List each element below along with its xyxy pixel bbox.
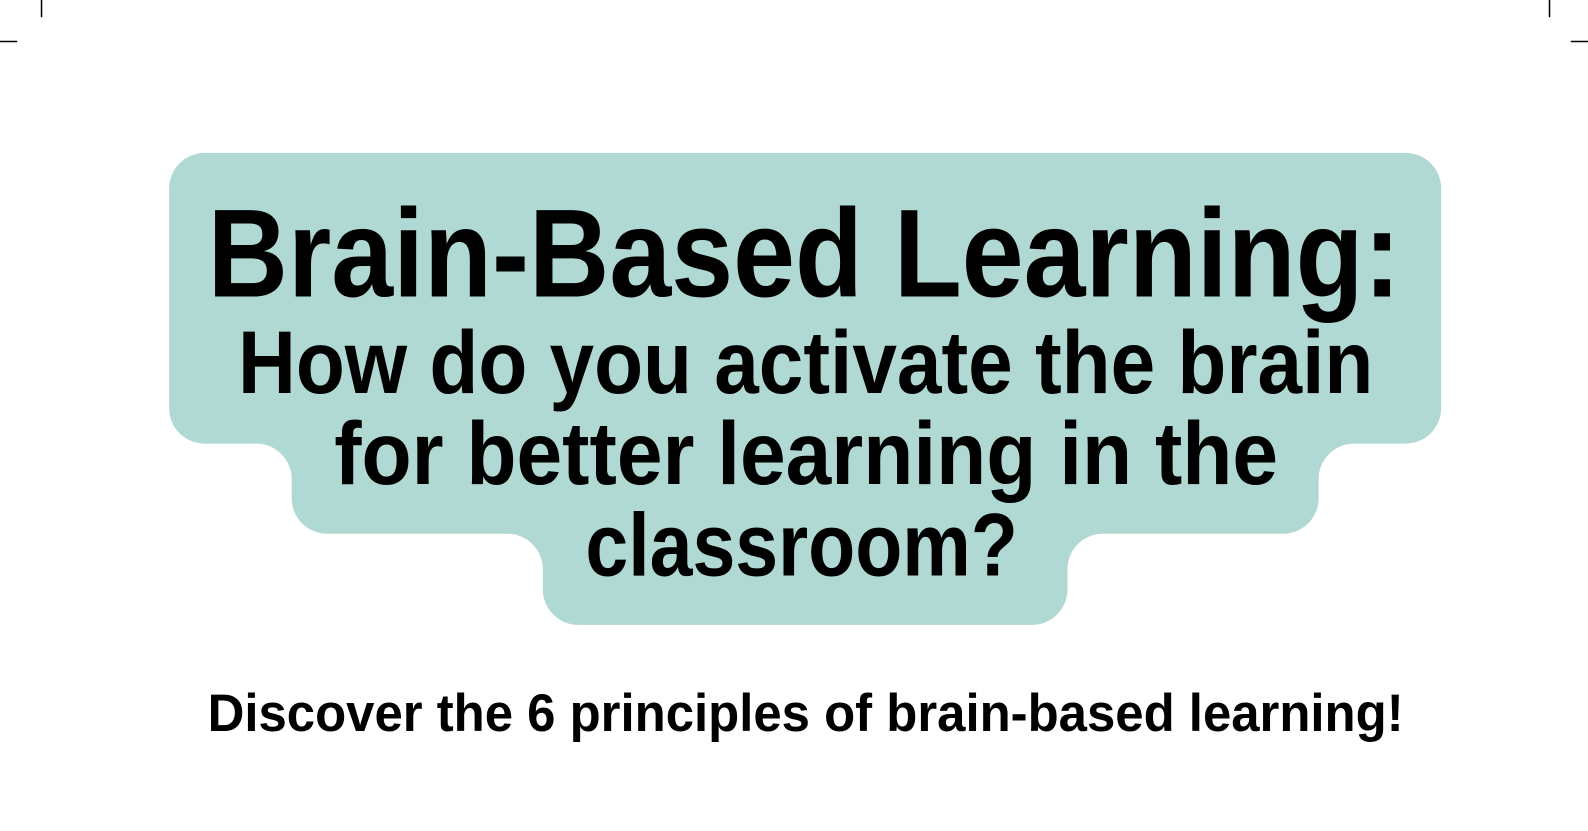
title: How do you activate the brain: [238, 312, 1373, 412]
crop marks: [0, 0, 1588, 42]
subtitle: Discover the 6 principles of brain-based learning!: [208, 684, 1404, 743]
title: classroom?: [585, 494, 1018, 594]
title: for better learning in the: [334, 403, 1278, 503]
title: [208, 183, 1401, 594]
title panel: [169, 153, 1441, 625]
title: Brain-Based Learning:: [208, 183, 1401, 324]
